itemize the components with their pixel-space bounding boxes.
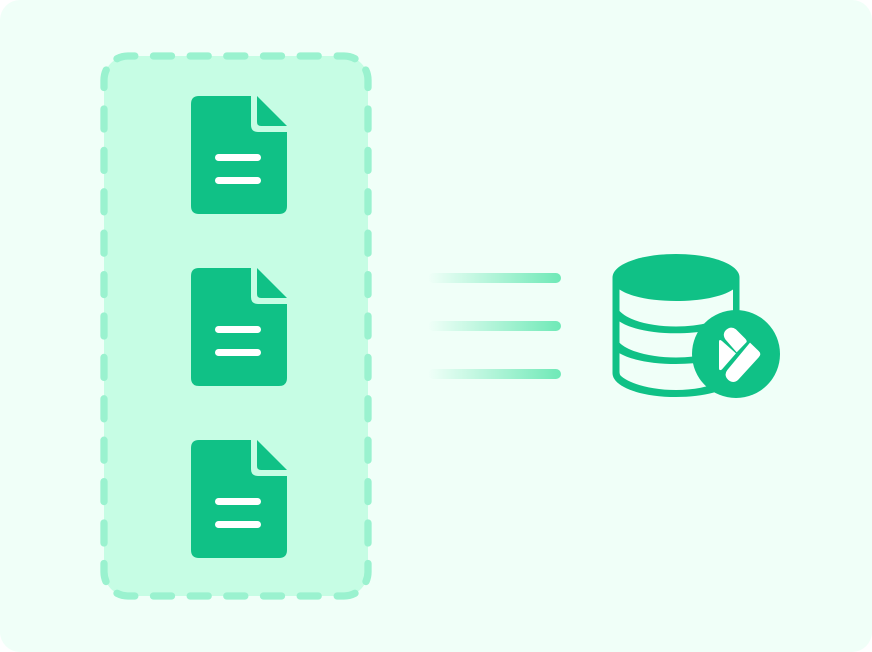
icon: database with brand badge <box>612 254 780 398</box>
arrow: three fading flow lines <box>428 273 561 379</box>
badge logo <box>719 328 760 382</box>
icon: document 2 <box>191 268 287 386</box>
icon: document 1 <box>191 96 287 214</box>
database cylinder <box>612 254 740 397</box>
badge circle <box>692 310 780 398</box>
panel: dashed document group <box>104 56 368 596</box>
icon: document 3 <box>191 440 287 558</box>
